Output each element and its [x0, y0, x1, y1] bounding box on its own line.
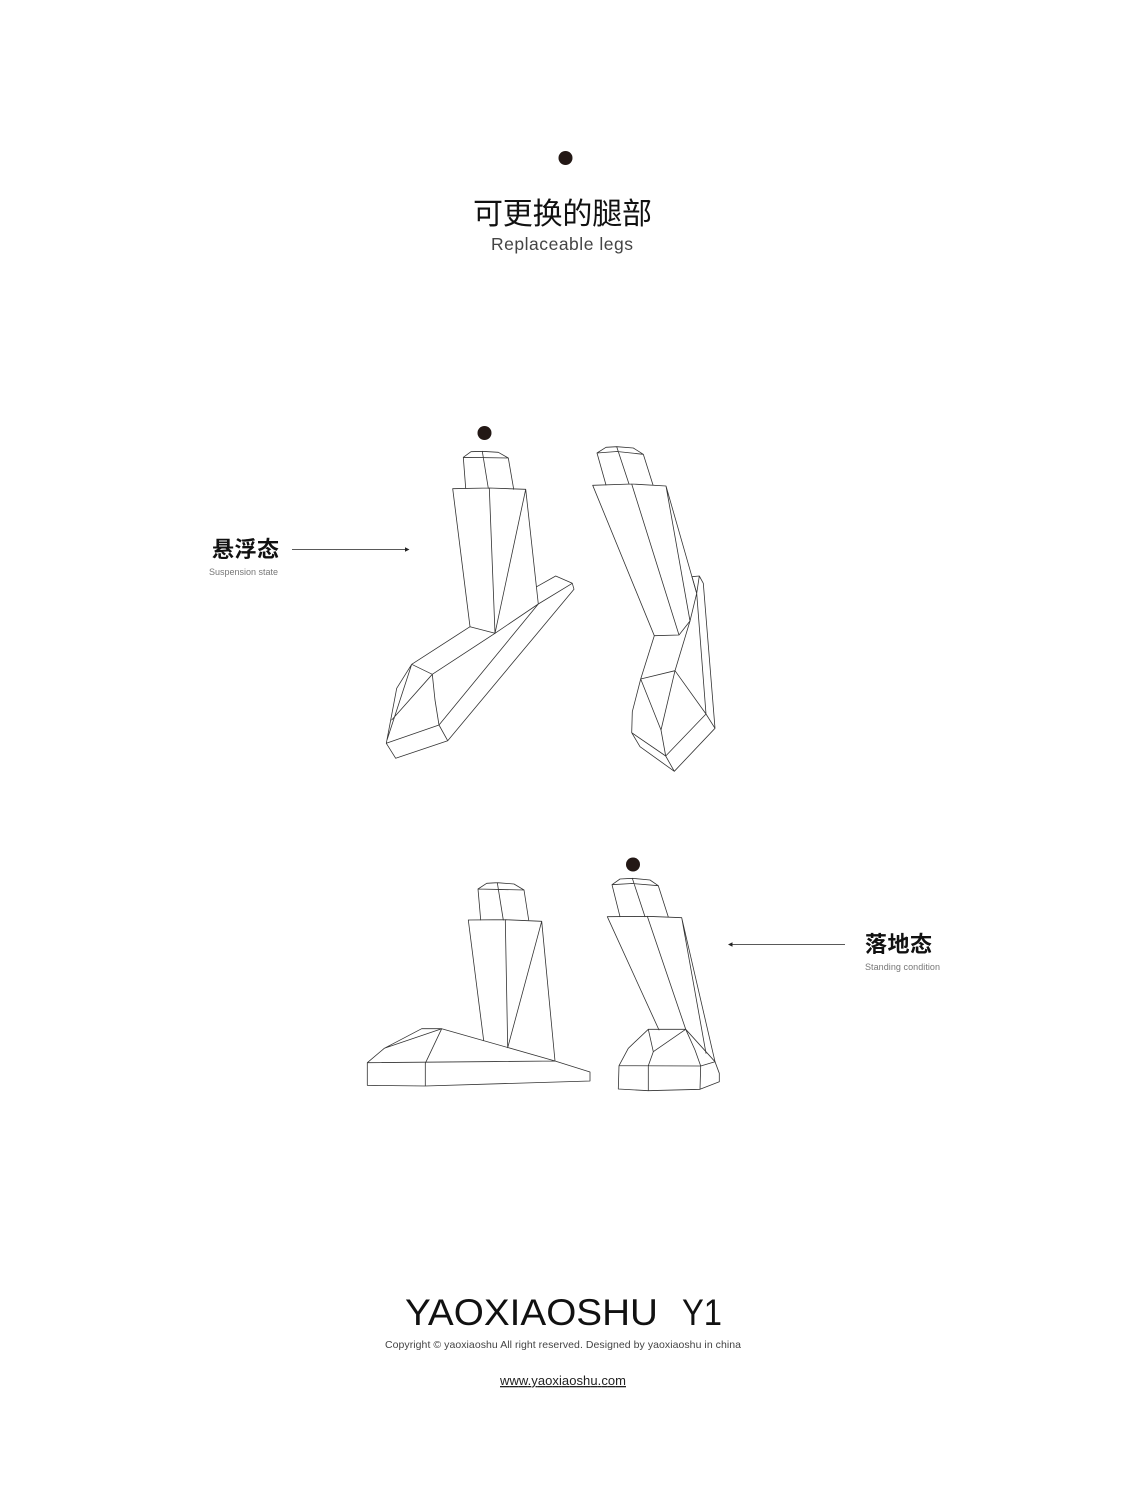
footer [385, 1291, 741, 1388]
title block [473, 151, 652, 254]
leg: standing front view [367, 883, 590, 1086]
leg: standing side view [607, 878, 719, 1091]
leg: suspended front view [386, 451, 574, 758]
heading: Chinese title: 可更换的腿部 [473, 198, 652, 231]
heading: English subtitle: Replaceable legs [491, 234, 633, 254]
label: suspension state: Suspension state [209, 567, 278, 577]
icon: title dot [558, 151, 572, 165]
label: suspension state: 悬浮态 [212, 537, 279, 562]
label: standing condition: Standing condition [865, 962, 940, 972]
icon: dot on suspended leg [478, 426, 492, 440]
leg: suspended side view [593, 447, 715, 771]
footer: website link: www.yaoxiaoshu.com [499, 1373, 626, 1388]
icon: dot on standing leg [626, 858, 640, 872]
footer: copyright: Copyright © yaoxiaoshu All right reserved. Designed by yaoxiaoshu in china [385, 1339, 741, 1351]
arrow: standing condition [728, 942, 845, 947]
label: standing condition: 落地态 [865, 932, 932, 957]
arrow: suspension state [292, 547, 410, 552]
footer: product name: Y1 [682, 1291, 722, 1333]
label: suspension state [209, 537, 279, 577]
label: standing condition [865, 932, 940, 972]
footer: product name: YAOXIAOSHU [405, 1291, 658, 1333]
